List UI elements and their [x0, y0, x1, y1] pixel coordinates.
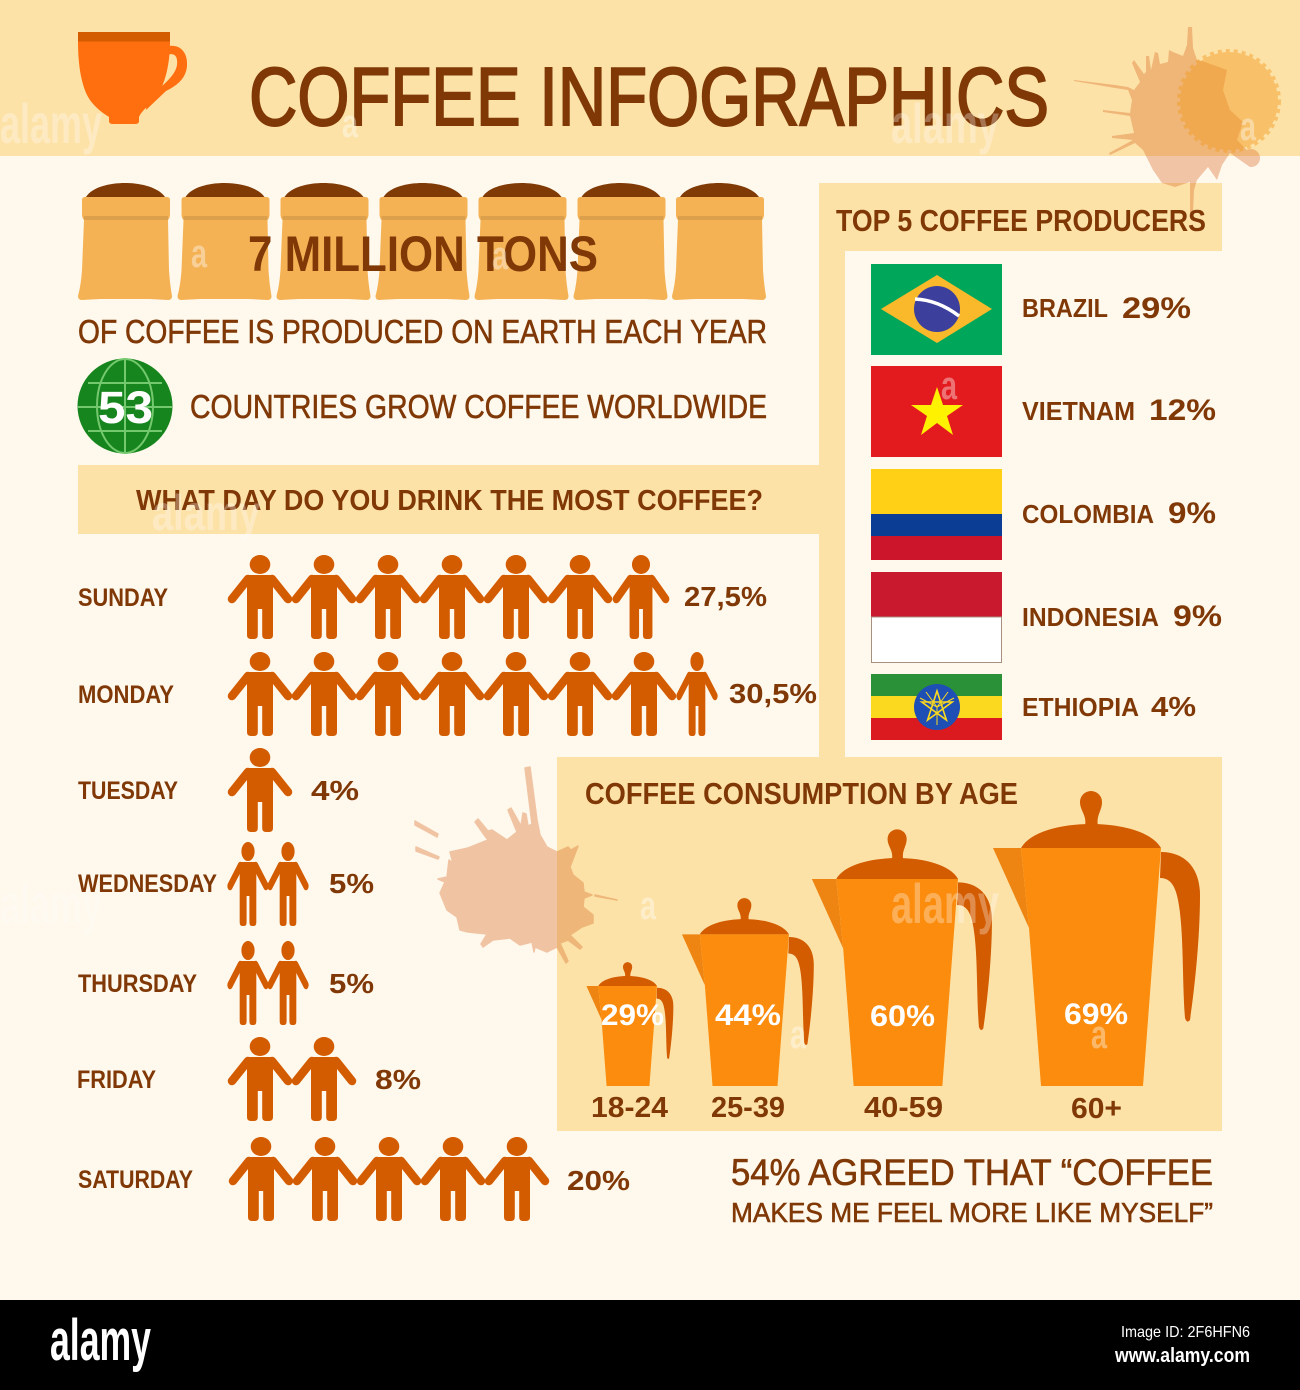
text: Brazil share: [1022, 292, 1191, 325]
row: Thursday: THURSDAY: [78, 970, 197, 998]
row: Monday: MONDAY: [78, 681, 174, 709]
watermarks: a: [941, 364, 958, 408]
row: Friday: 8%: [375, 1064, 421, 1095]
jug: 60+: 60+: [1071, 1093, 1122, 1125]
watermarks: alamy: [0, 92, 102, 155]
text: Indonesia share: [1022, 600, 1222, 633]
watermarks: a: [1091, 1013, 1108, 1057]
footer image id: [1114, 1324, 1250, 1367]
text: Colombia share: [1022, 497, 1216, 530]
footer bar: [0, 1300, 1300, 1390]
panel: consumption by age: [557, 757, 1222, 1131]
text: countries caption: COUNTRIES GROW COFFEE WORLDWIDE: [190, 388, 767, 425]
jug: 25-39: 25-39: [711, 1092, 785, 1124]
text: Indonesia share: INDONESIA: [1022, 602, 1159, 632]
panel: coffee day heading band: [78, 465, 819, 534]
watermarks: alamy: [152, 485, 260, 541]
row: Sunday: 27,5%: [684, 581, 767, 612]
flag: Ethiopia: [871, 674, 1002, 740]
watermarks: a: [790, 1013, 807, 1057]
text: Ethiopia share: 4%: [1151, 691, 1196, 722]
callout: 54 percent quote: [731, 1152, 1213, 1228]
text: production caption: OF COFFEE IS PRODUCED ON EARTH EACH YEAR: [78, 313, 767, 350]
footer logo: alamy: [50, 1308, 151, 1373]
icon: globe with 53: 53: [98, 382, 153, 433]
text: Indonesia share: 9%: [1173, 600, 1222, 633]
watermarks: alamy: [891, 872, 999, 935]
jug: 18-24: 18-24: [591, 1092, 668, 1124]
text: Vietnam share: 12%: [1149, 394, 1216, 427]
row: Wednesday: [78, 842, 374, 926]
jug: 40-59: 60%: [870, 1000, 935, 1033]
jug: 60+: 69%: [1064, 998, 1128, 1031]
heading: consumption by age: COFFEE CONSUMPTION BY AGE: [585, 776, 1018, 811]
row: Tuesday: TUESDAY: [78, 777, 178, 805]
jug: 40-59: 40-59: [864, 1092, 943, 1124]
row: Thursday: 5%: [329, 968, 374, 999]
panel: top 5 producers frame: [819, 183, 1222, 757]
flag: Colombia: [871, 469, 1002, 560]
footer image id: www.alamy.com: [1114, 1345, 1250, 1367]
heading: what day: WHAT DAY DO YOU DRINK THE MOST COFFEE?: [136, 485, 763, 517]
coffee splash: top right: [1074, 27, 1279, 213]
jug: 60+: [993, 791, 1200, 1125]
icon: coffee cup: [78, 32, 187, 124]
jug: 18-24: 29%: [601, 999, 664, 1032]
watermarks: a: [492, 234, 509, 278]
watermarks: a: [191, 232, 208, 276]
icon: globe with 53: [78, 358, 172, 454]
text: Colombia share: COLOMBIA: [1022, 499, 1154, 529]
row: Monday: [78, 652, 817, 736]
text: Colombia share: 9%: [1168, 497, 1216, 530]
text: Brazil share: 29%: [1122, 292, 1191, 325]
icon row: seven coffee sacks: [78, 183, 766, 300]
watermarks: [0, 92, 1257, 1057]
row: Saturday: [78, 1137, 630, 1221]
text: Vietnam share: [1022, 394, 1216, 427]
jug: 25-39: [682, 898, 814, 1124]
header band: [0, 0, 1300, 156]
text: Brazil share: BRAZIL: [1022, 293, 1108, 323]
row: Saturday: SATURDAY: [78, 1166, 193, 1194]
jug: 40-59: [812, 829, 992, 1124]
flag: Indonesia: [871, 572, 1002, 662]
watermarks: a: [640, 884, 657, 928]
callout: 54 percent quote: MAKES ME FEEL MORE LIKE MYSELF”: [731, 1197, 1213, 1228]
heading: top 5 producers: TOP 5 COFFEE PRODUCERS: [836, 203, 1206, 238]
row: Saturday: 20%: [567, 1165, 630, 1196]
text: Vietnam share: VIETNAM: [1022, 396, 1135, 426]
watermarks: a: [342, 102, 359, 146]
row: Friday: [77, 1037, 421, 1121]
row: Sunday: SUNDAY: [78, 584, 168, 612]
row: Wednesday: 5%: [329, 868, 374, 899]
flag: Brazil: [871, 264, 1002, 355]
coffee splash: centre: [415, 767, 617, 963]
row: Wednesday: WEDNESDAY: [78, 870, 217, 898]
row: Monday: 30,5%: [729, 678, 817, 709]
jug: 25-39: 44%: [715, 999, 781, 1032]
watermarks: a: [1240, 105, 1257, 149]
flag: Vietnam: [871, 366, 1002, 457]
callout: 54 percent quote: 54% AGREED THAT “COFFEE: [731, 1152, 1213, 1193]
row: Friday: FRIDAY: [77, 1066, 156, 1094]
watermarks: alamy: [891, 92, 999, 155]
watermarks: alamy: [0, 872, 102, 935]
text: Ethiopia share: ETHIOPIA: [1022, 692, 1139, 722]
row: Sunday: [78, 555, 767, 639]
text: Ethiopia share: [1022, 691, 1196, 722]
footer image id: Image ID: 2F6HFN6: [1121, 1324, 1250, 1341]
row: Tuesday: [78, 748, 359, 832]
jug: 18-24: [586, 962, 673, 1124]
title: COFFEE INFOGRAPHICS: [249, 50, 1049, 143]
row: Thursday: [78, 941, 374, 1025]
row: Tuesday: 4%: [311, 775, 359, 806]
headline: 7 million tons: 7 MILLION TONS: [248, 226, 598, 282]
